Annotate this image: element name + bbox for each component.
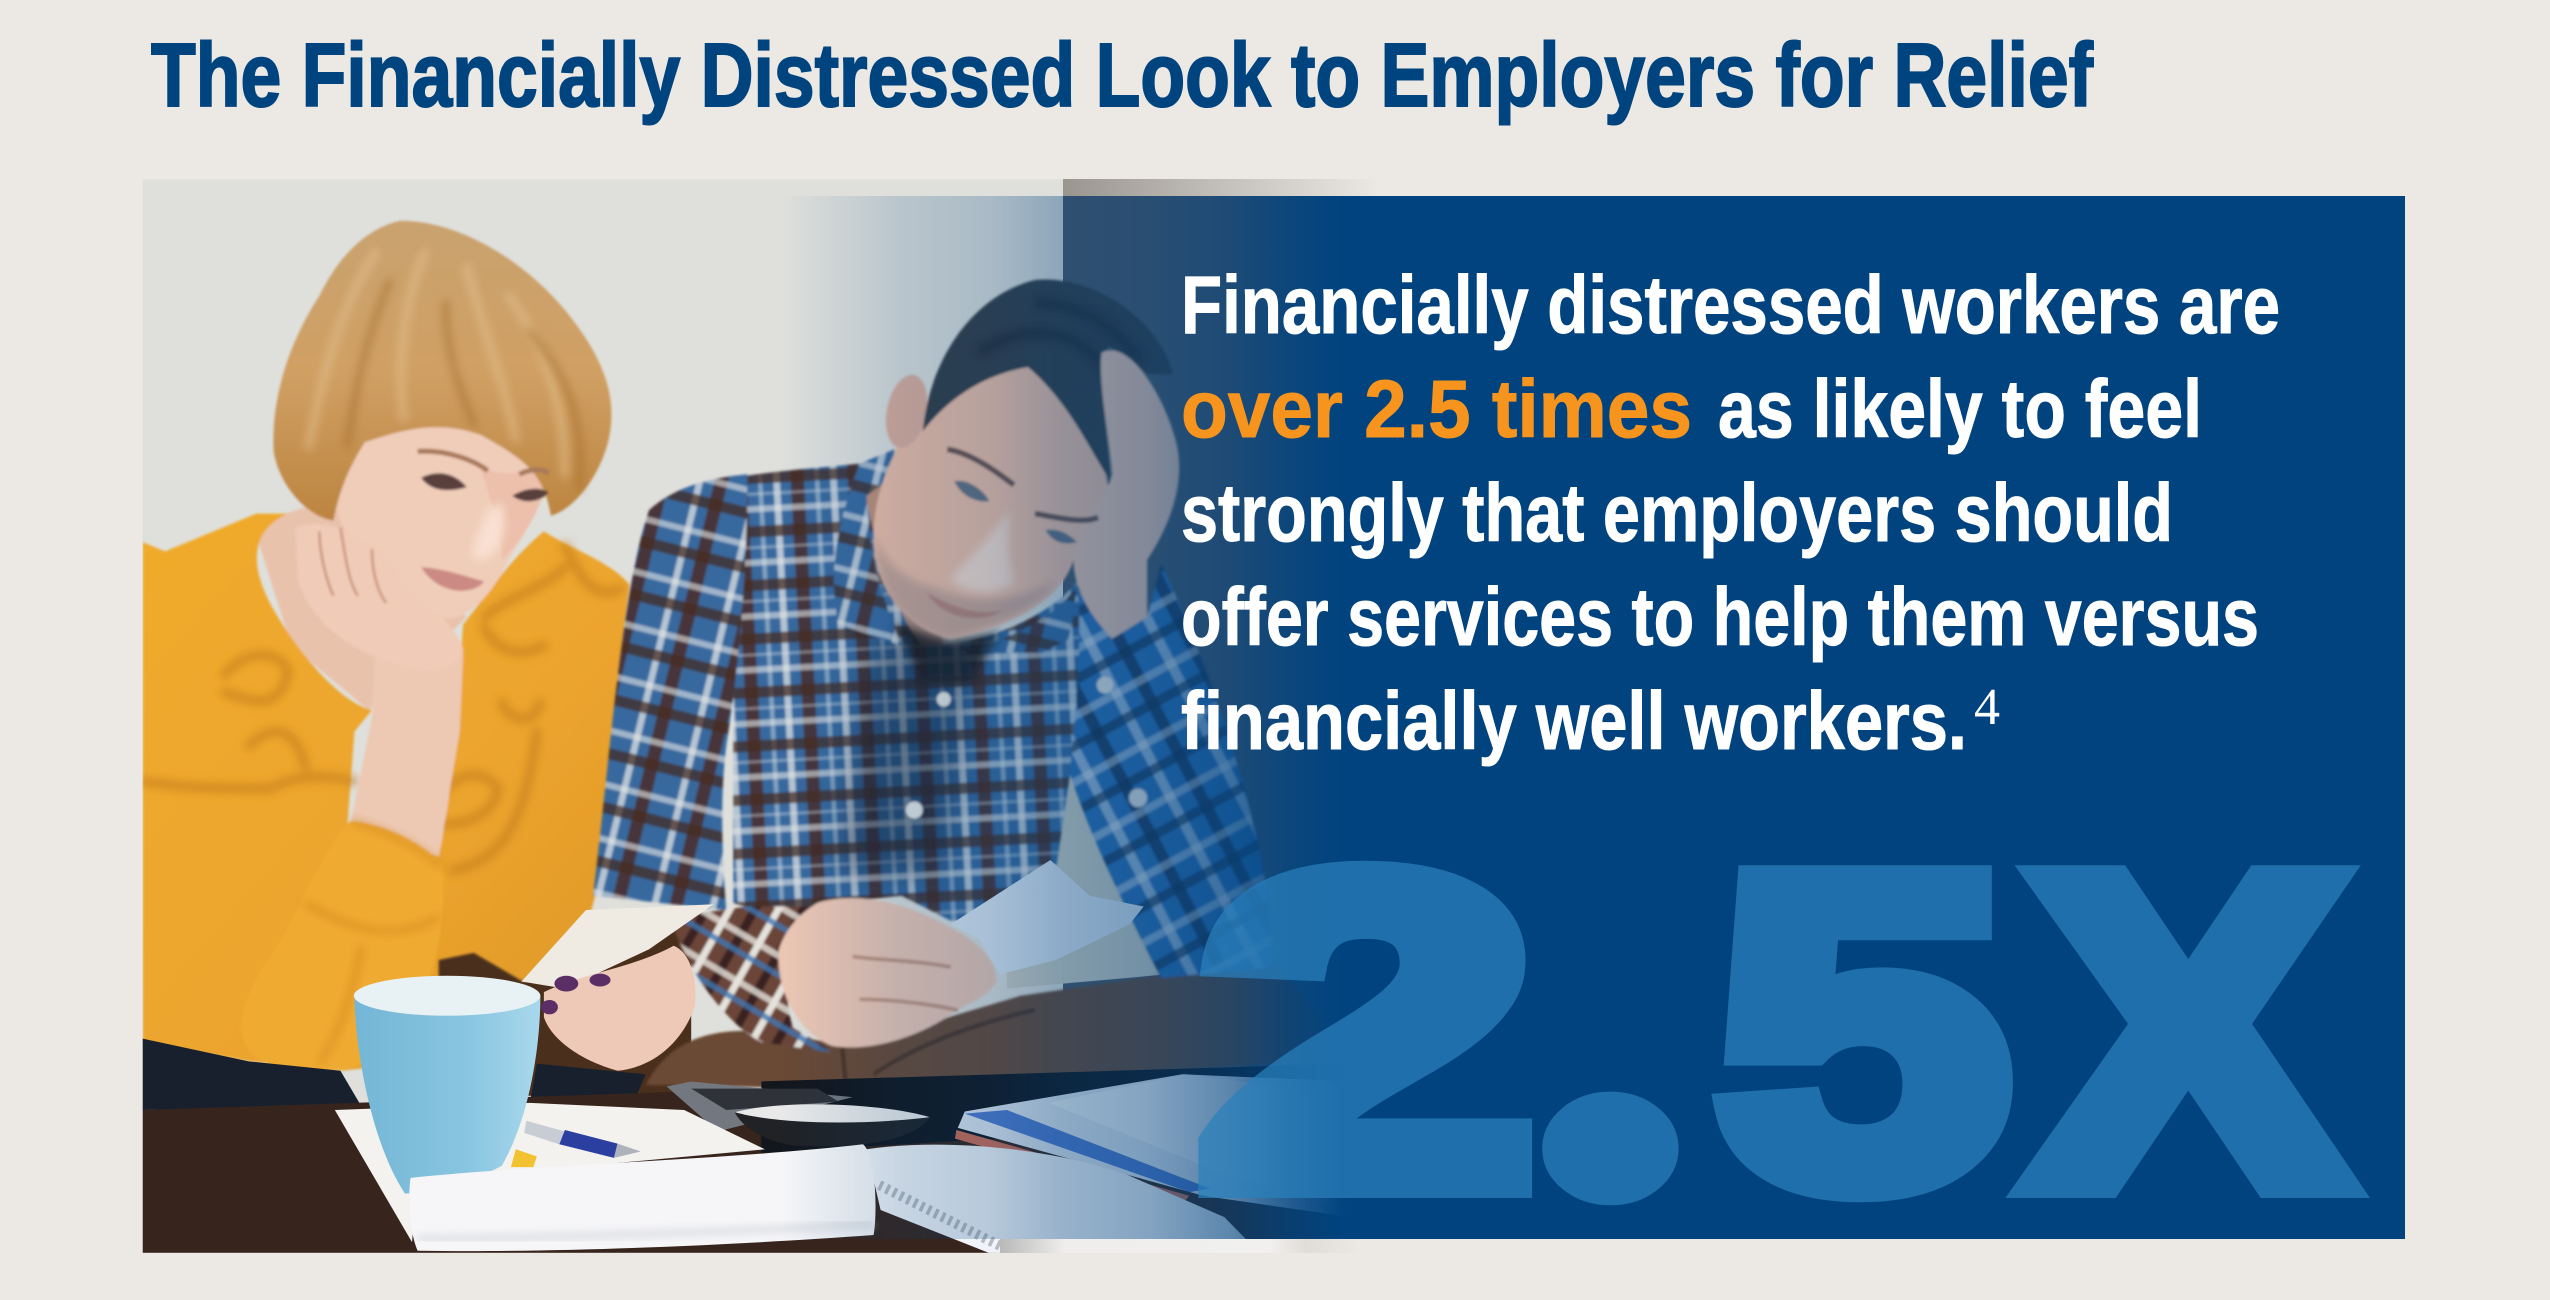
- blouse sleeve cuff: [267, 820, 441, 1070]
- man brows and eyes: [947, 449, 1098, 520]
- woman face: [336, 427, 542, 618]
- man nose: [951, 510, 1014, 592]
- white object on calculator: [735, 1104, 930, 1146]
- photo: worried couple reviewing bills: [143, 179, 1358, 1260]
- woman blouse: [143, 514, 629, 1071]
- man face: [874, 367, 1109, 639]
- woman dark trousers: [143, 1039, 646, 1110]
- overlay: blue fade across the photo: [780, 196, 2405, 1239]
- man ear: [880, 371, 933, 452]
- pen barrel: [524, 1121, 565, 1144]
- dark shadow at collar: [895, 624, 1000, 681]
- hair strands: [309, 253, 565, 474]
- mug body: [354, 996, 540, 1194]
- man neck: [856, 460, 944, 660]
- sticky note: [511, 1149, 537, 1167]
- woman hair: [273, 221, 611, 521]
- woman hand at chin: [296, 525, 466, 655]
- folders and papers right: [958, 1074, 1351, 1217]
- top strip fade: [1063, 179, 1380, 196]
- woman cheek shading: [482, 470, 543, 558]
- title: The Financially Distressed Look to Employers for Relief: [151, 26, 2094, 126]
- decimal point: .: [1533, 724, 1688, 1295]
- paper in woman's hand: [521, 904, 714, 989]
- panel: solid blue statistic panel: [1063, 196, 2405, 1239]
- shirt shadow under chin: [839, 631, 972, 874]
- woman lips: [421, 567, 484, 591]
- man shirt sleeve right: [1070, 564, 1273, 978]
- bottom strip fade: [1000, 1239, 1360, 1253]
- blouse ruffles and folds: [144, 546, 621, 871]
- man mouth: [926, 592, 1003, 618]
- wall: [143, 180, 1063, 1102]
- white rolled notebook: [409, 1144, 876, 1251]
- woman forearm: [351, 653, 463, 856]
- notebook right: [867, 1145, 1266, 1260]
- man shirt left sleeve: [593, 474, 747, 910]
- nails: [541, 974, 611, 1014]
- text block: main statement: [1181, 260, 2280, 767]
- man collar: [834, 449, 1077, 653]
- man hand holding paper: [779, 898, 996, 1047]
- sofa behind arm: [1007, 774, 1168, 989]
- coffee mug: [354, 976, 540, 1194]
- woman neck and chest: [253, 496, 467, 710]
- man stubble shading: [875, 531, 1056, 640]
- figure: man: [593, 280, 1351, 1089]
- footnote marker: 4: [1974, 679, 2000, 736]
- line 1: Financially distressed workers are: [1181, 260, 2280, 351]
- pen grip: [559, 1130, 618, 1158]
- man trousers: [646, 974, 1289, 1088]
- woman nose: [473, 503, 504, 560]
- table wood: [143, 1067, 1351, 1253]
- line 5: financially well workers.: [1181, 676, 1967, 767]
- man shirt cuff: [670, 906, 835, 1053]
- line 2 remainder: as likely to feel: [1718, 364, 2202, 455]
- line 4: offer services to help them versus: [1181, 572, 2259, 663]
- man shirt torso: [733, 464, 1079, 921]
- large watermark figure 2.5X: [1198, 724, 2347, 1295]
- line 2 highlight: over 2.5 times: [1181, 364, 1692, 455]
- line 3: strongly that employers should: [1181, 468, 2173, 559]
- white sheet on table: [335, 1103, 765, 1242]
- man hand on head: [1074, 350, 1179, 639]
- figure: woman: [143, 221, 629, 1072]
- digit 5: 5: [1716, 785, 2010, 1276]
- woman hand holding paper: [544, 946, 696, 1071]
- man hair: [923, 280, 1173, 481]
- woman eyes and brows: [421, 473, 467, 490]
- calculator: [667, 1081, 853, 1131]
- paper in man's hand: [951, 860, 1144, 974]
- man buttons: [906, 676, 1147, 819]
- pen: [524, 1121, 641, 1158]
- digit 2: 2: [1198, 786, 1536, 1277]
- dark wall corner: [1063, 196, 1307, 1068]
- mug rim: [354, 976, 540, 1016]
- spiral binding: [879, 1185, 1014, 1253]
- letter X: X: [2031, 785, 2347, 1277]
- dark gap between figures: [432, 917, 691, 1096]
- pen tip: [614, 1144, 641, 1158]
